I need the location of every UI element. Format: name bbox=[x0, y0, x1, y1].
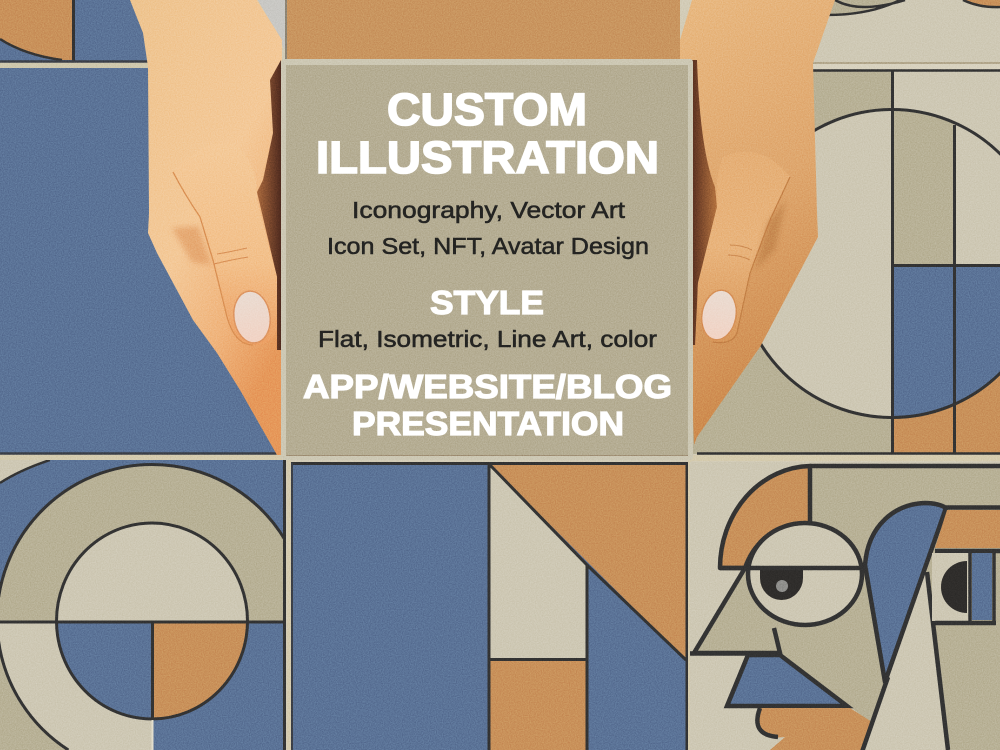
right eye bbox=[932, 551, 996, 623]
heading: style: STYLE bbox=[430, 284, 544, 321]
left thumb nail bbox=[231, 289, 273, 345]
right thumb nail bbox=[698, 287, 740, 343]
tile: bottom middle geometry bbox=[291, 460, 691, 750]
right palm crease shadow bbox=[755, 200, 786, 270]
left palm crease shadow bbox=[172, 226, 211, 265]
left thumb crease bbox=[214, 248, 248, 264]
head mass bbox=[692, 466, 1000, 750]
strip under right tile bbox=[690, 455, 1000, 461]
eye bbox=[748, 523, 862, 625]
heading: formats: PRESENTATION bbox=[352, 405, 624, 442]
moustache bbox=[727, 655, 847, 706]
hair orange arc bbox=[720, 466, 810, 568]
central card bbox=[281, 59, 693, 460]
left hand bbox=[130, 0, 282, 455]
orange brow bbox=[935, 510, 1000, 548]
services list: Icon Set, NFT, Avatar Design bbox=[327, 233, 649, 259]
heading: custom illustration: CUSTOM bbox=[387, 84, 587, 135]
heading: formats: APP/WEBSITE/BLOG bbox=[303, 368, 672, 405]
right thumb bbox=[698, 152, 790, 343]
tile: large blue bbox=[0, 68, 290, 460]
light neck triangle bbox=[863, 572, 948, 750]
nose bbox=[694, 568, 780, 653]
left hand shadow bbox=[257, 60, 281, 350]
left thumb outline bbox=[173, 172, 253, 345]
right thumb outline bbox=[713, 177, 790, 343]
left thumb bbox=[173, 143, 277, 345]
tile: right circle composition bbox=[690, 71, 1000, 455]
strip between bottom tiles bbox=[287, 460, 291, 750]
tile: bottom right abstract face bbox=[690, 462, 1000, 750]
right tile frame lines bbox=[697, 70, 1000, 454]
heading: custom illustration bbox=[316, 84, 659, 183]
right hand shadow bbox=[692, 60, 717, 345]
tile: top left bbox=[0, 0, 148, 68]
tile: top middle orange bbox=[258, 0, 680, 60]
tile: top right bbox=[800, 0, 1000, 69]
heading: custom illustration: ILLUSTRATION bbox=[316, 132, 659, 183]
right hand bbox=[680, 0, 835, 445]
tile: bottom left ring bbox=[0, 460, 286, 750]
services list: Iconography, Vector Art bbox=[352, 197, 626, 223]
blue ear shape bbox=[865, 503, 946, 682]
heading: formats bbox=[303, 368, 672, 442]
style list: Flat, Isometric, Line Art, color bbox=[318, 326, 657, 352]
right thumb crease bbox=[728, 245, 752, 260]
mouth bbox=[758, 708, 872, 750]
services list bbox=[327, 197, 649, 259]
